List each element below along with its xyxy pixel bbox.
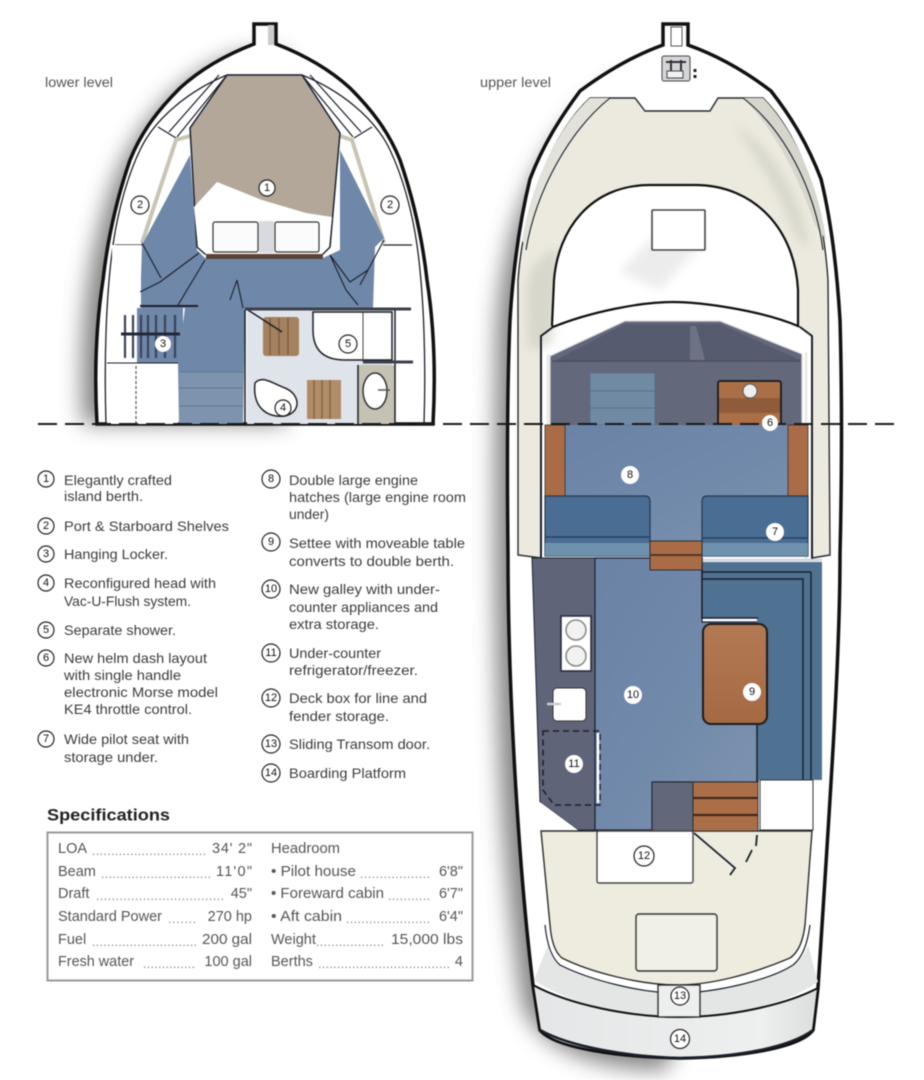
specifications table: • Pilot house (271, 864, 356, 880)
specifications table: 45" (231, 886, 252, 902)
aft deck (541, 831, 812, 985)
specifications table: Fresh water (58, 954, 134, 970)
specifications table: 11'0" (216, 864, 252, 880)
badge 6: 6 (767, 417, 773, 429)
badge 13 (671, 987, 689, 1005)
item 4: 4 (43, 577, 49, 589)
specifications table: 270 hp (208, 909, 252, 925)
settee (702, 558, 822, 780)
item 9: Settee with moveable table (289, 535, 465, 551)
specifications table: .................. (316, 935, 384, 949)
item 12: 12 (265, 692, 277, 704)
deck box (597, 831, 693, 883)
item 12: Deck box for line and (289, 690, 427, 706)
badge 12: 12 (638, 850, 650, 862)
side deck gray strips (743, 98, 826, 240)
head compartment (245, 310, 395, 424)
item 13: Sliding Transom door. (289, 736, 430, 752)
saloon floor (545, 425, 808, 556)
main cabin floor (595, 558, 758, 830)
wood steps centre (650, 541, 702, 570)
specifications table: Weight (271, 932, 316, 948)
badge 11: 11 (568, 758, 580, 770)
badge 13: 13 (674, 990, 686, 1002)
cooktop (561, 616, 591, 671)
helm console (718, 381, 781, 436)
lower level hull plan (82, 24, 434, 424)
badge 2 starboard (381, 196, 399, 214)
specifications table: 100 gal (204, 954, 252, 970)
item 14 (262, 764, 406, 782)
sliding door (694, 833, 757, 875)
deck divider dashed line (38, 423, 896, 425)
badge 4: 4 (280, 402, 286, 414)
specifications heading: Specifications (47, 806, 170, 824)
item 10: counter appliances and (289, 599, 438, 615)
item 6: 6 (43, 652, 49, 664)
item 14: Boarding Platform (289, 765, 406, 781)
specifications table: Beam (58, 864, 96, 880)
badge 3: 3 (160, 338, 166, 350)
badge 9 (743, 683, 761, 701)
specifications table: Fuel (58, 932, 86, 948)
specifications table: Standard Power (58, 909, 162, 925)
specifications table: ............................ (92, 935, 197, 949)
specifications table: .............................. (92, 844, 206, 858)
item 11 (262, 644, 418, 678)
item 8 (262, 470, 466, 522)
helm dash (550, 321, 802, 426)
specifications table: Headroom (271, 841, 340, 857)
island berth (190, 75, 340, 254)
bulkhead shelves (245, 309, 413, 362)
white locker (760, 780, 813, 830)
hanging locker (107, 308, 180, 424)
specifications table: .............. (143, 957, 195, 971)
item 10 (262, 580, 440, 632)
item 8: Double large engine (289, 472, 418, 488)
item 6: New helm dash layout (64, 650, 207, 666)
forward shelf segments (115, 75, 412, 245)
companionway steps (590, 373, 655, 425)
specifications table: ........... (388, 889, 430, 903)
foredeck white arch (552, 185, 798, 327)
specifications table: 6'4" (439, 909, 463, 925)
specifications table: 4 (455, 954, 463, 970)
cabin floor (140, 150, 384, 424)
label: upper level: upper level (480, 74, 551, 90)
item 7: Wide pilot seat with (64, 731, 189, 747)
item 11: Under-counter (289, 645, 381, 661)
lower hull inner line (105, 75, 425, 424)
badge 4 (275, 400, 291, 416)
badge 7 (766, 523, 784, 541)
specifications table: .................. (360, 867, 430, 881)
berth cover (194, 182, 332, 254)
refrigerator outline (543, 731, 600, 805)
stem inner block (268, 25, 274, 45)
hull shadow (495, 78, 686, 1070)
badge 5 (339, 335, 357, 353)
item 4: Vac-U-Flush system. (64, 593, 191, 609)
item 10: extra storage. (289, 616, 379, 632)
item 6: with single handle (63, 667, 181, 683)
side deck lines (526, 98, 823, 250)
item 2: 2 (43, 520, 49, 532)
specifications table: ............................. (101, 867, 211, 881)
item 1: 1 (43, 473, 49, 485)
item 6: KE4 throttle control. (64, 701, 192, 717)
item 13: 13 (265, 738, 277, 750)
badge 10 (624, 686, 642, 704)
lower hull outline (96, 24, 434, 424)
pillows (213, 222, 319, 252)
foredeck cream (518, 98, 830, 558)
item 6 (38, 650, 218, 717)
badge 8: 8 (627, 469, 633, 481)
specifications table: 200 gal (202, 932, 252, 948)
specifications table: • Foreward cabin (271, 886, 384, 902)
badge 5: 5 (345, 338, 351, 350)
specifications table: 34' 2" (212, 841, 252, 857)
item 3: 3 (43, 548, 49, 560)
wood aft steps (693, 782, 758, 831)
item 7 (38, 731, 189, 765)
item 10: 10 (265, 583, 277, 595)
left side strip (522, 98, 610, 250)
badge 7: 7 (772, 526, 778, 538)
specifications table: ....... (168, 912, 196, 926)
badge 9: 9 (749, 686, 755, 698)
item 11: 11 (265, 647, 277, 659)
item 9: 9 (268, 536, 274, 548)
specifications table: ................................... (318, 957, 450, 971)
badge 1 (259, 180, 275, 196)
specifications table: 6'7" (439, 886, 463, 902)
wood side panels (545, 425, 808, 496)
galley sink (547, 688, 586, 721)
item 4: Reconfigured head with (64, 575, 216, 591)
item 1 (38, 471, 172, 504)
specifications table: LOA (58, 841, 87, 857)
item 9 (262, 533, 465, 569)
item 7: storage under. (64, 749, 158, 765)
item 10: New galley with under- (289, 581, 440, 597)
specifications table: ...................... (346, 912, 430, 926)
label: lower level: lower level (45, 74, 113, 90)
badge 3 (155, 336, 171, 352)
item 4 (38, 575, 216, 609)
specifications table: 6'8" (439, 864, 463, 880)
item 7: 7 (43, 733, 49, 745)
specifications table: • Aft cabin (271, 909, 342, 925)
specifications table: 15,000 lbs (391, 932, 463, 948)
transom triangle (540, 802, 578, 830)
badge 10: 10 (627, 689, 639, 701)
galley counter (532, 558, 595, 830)
cabin walls (541, 327, 812, 560)
specifications table (48, 832, 472, 980)
specifications table: Draft (58, 886, 89, 902)
transom side band (534, 945, 818, 1017)
item 12: fender storage. (289, 708, 389, 724)
specifications table: Berths (271, 954, 313, 970)
badge 14 (670, 1030, 690, 1048)
item 3: Hanging Locker. (64, 546, 168, 562)
item 1: island berth. (64, 488, 143, 504)
specifications table: ................................. (96, 889, 224, 903)
dinette table (703, 624, 767, 782)
pilot seats (545, 496, 808, 556)
left locker floor (137, 308, 183, 363)
steps (179, 372, 243, 424)
badge 8 (621, 466, 639, 484)
item 5: 5 (43, 624, 49, 636)
port and starboard storage (112, 245, 412, 308)
item 6: electronic Morse model (64, 684, 218, 700)
aft hatch (636, 914, 717, 971)
badge 2 starboard: 2 (387, 199, 393, 211)
transom door and swim platform (533, 985, 818, 1058)
item 8: under) (289, 506, 329, 522)
item 14: 14 (265, 767, 277, 779)
item 2: Port & Starboard Shelves (64, 518, 229, 534)
deck shading (526, 125, 810, 350)
badge 12 (634, 846, 654, 866)
windlass (662, 27, 695, 81)
legend right column (262, 470, 466, 782)
badge 6 (762, 415, 778, 431)
aft deck rim (545, 925, 810, 993)
legend left column (38, 471, 229, 765)
badge 2 port: 2 (137, 199, 143, 211)
item 8: hatches (large engine room (289, 489, 466, 505)
item 12 (262, 689, 427, 724)
item 11: refrigerator/freezer. (289, 662, 418, 678)
item 1: Elegantly crafted (64, 472, 172, 488)
item 5: Separate shower. (64, 622, 176, 638)
item 9: converts to double berth. (289, 553, 454, 569)
dark step (652, 782, 693, 831)
cabin door lines (140, 240, 384, 308)
badge 11 (565, 755, 583, 773)
badge 1: 1 (264, 182, 270, 194)
badge 14: 14 (674, 1033, 686, 1045)
hatch (652, 210, 705, 250)
upper level hull plan (495, 24, 842, 1070)
badge 2 port (131, 196, 149, 214)
item 8: 8 (268, 473, 274, 485)
hull outline (507, 24, 842, 1058)
